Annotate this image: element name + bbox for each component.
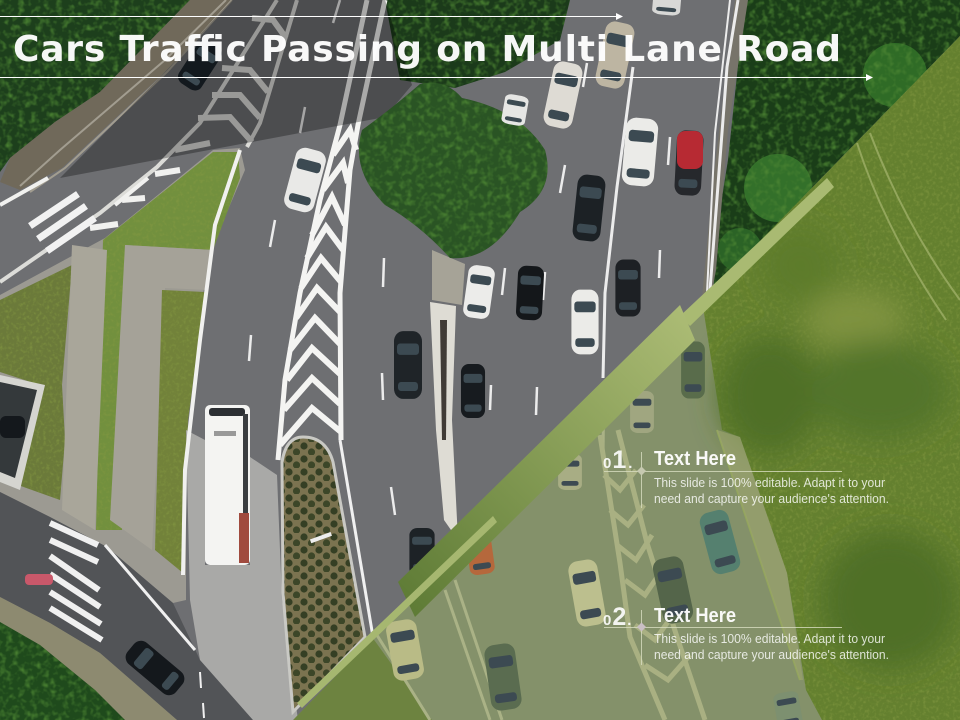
concrete walkway xyxy=(110,245,213,550)
overlay cars xyxy=(385,342,804,720)
bottom-left crosswalk xyxy=(50,523,204,718)
overlay lawn shading xyxy=(720,225,960,670)
overlay chevrons xyxy=(600,430,705,720)
title: Cars Traffic Passing on Multi Lane Road xyxy=(13,29,841,70)
planter xyxy=(282,437,373,712)
bus xyxy=(205,405,250,565)
accent bar xyxy=(398,305,695,617)
item 1 dividers xyxy=(604,452,842,508)
chevron zone A (upper left) xyxy=(0,0,297,575)
accent stripe upper xyxy=(680,178,834,326)
grass island xyxy=(96,152,240,530)
top-centre trees xyxy=(385,0,570,88)
overlay road surface xyxy=(293,36,960,720)
left walkway xyxy=(62,245,107,530)
grass strip xyxy=(155,290,205,573)
lane markings xyxy=(249,0,738,515)
overlay sidewalk xyxy=(717,430,803,680)
item 1 body: This slide is 100% editable. Adapt it to your xyxy=(654,476,885,490)
top-left trees xyxy=(0,0,190,172)
item 1 body: need and capture your audience's attention. xyxy=(654,492,889,506)
crosswalk top-left xyxy=(30,194,95,251)
landscaped ground xyxy=(0,148,245,603)
green overlay panel xyxy=(293,36,960,720)
item 2 dividers xyxy=(604,610,842,665)
item 2 body: This slide is 100% editable. Adapt it to your xyxy=(654,632,885,646)
cars on road xyxy=(122,0,704,699)
title rule bottom with arrow xyxy=(0,74,873,81)
item 1 number: 01. xyxy=(603,446,632,474)
item 1 xyxy=(603,446,889,508)
bus-stop concrete apron xyxy=(186,430,298,720)
left grass xyxy=(0,265,72,500)
item 2 xyxy=(603,603,889,665)
red motorbike xyxy=(25,574,53,585)
accent stripe lower xyxy=(297,516,497,708)
title rule top with arrow xyxy=(0,13,623,20)
road shadow band xyxy=(60,0,412,178)
bottom-left road xyxy=(0,492,253,720)
right foliage xyxy=(712,0,960,300)
item 2 heading: Text Here xyxy=(654,605,736,627)
item 1 marker xyxy=(637,466,646,476)
item 1 heading: Text Here xyxy=(654,448,736,470)
item 2 number: 02. xyxy=(603,603,631,631)
central tree xyxy=(359,83,548,258)
overlay median lines xyxy=(376,429,605,720)
concrete strip with curbs xyxy=(0,0,232,192)
overlay left verge xyxy=(293,637,432,720)
bottom-left trees xyxy=(0,597,177,720)
central median xyxy=(430,250,465,540)
overlay garden paths xyxy=(717,133,960,680)
overlay grass field xyxy=(702,36,960,720)
right kerb sidewalk xyxy=(700,0,748,330)
underpass box xyxy=(0,375,45,490)
item 2 body: need and capture your audience's attention. xyxy=(654,648,889,662)
item 2 marker xyxy=(637,622,646,632)
chevron zone B (central) xyxy=(278,0,385,460)
